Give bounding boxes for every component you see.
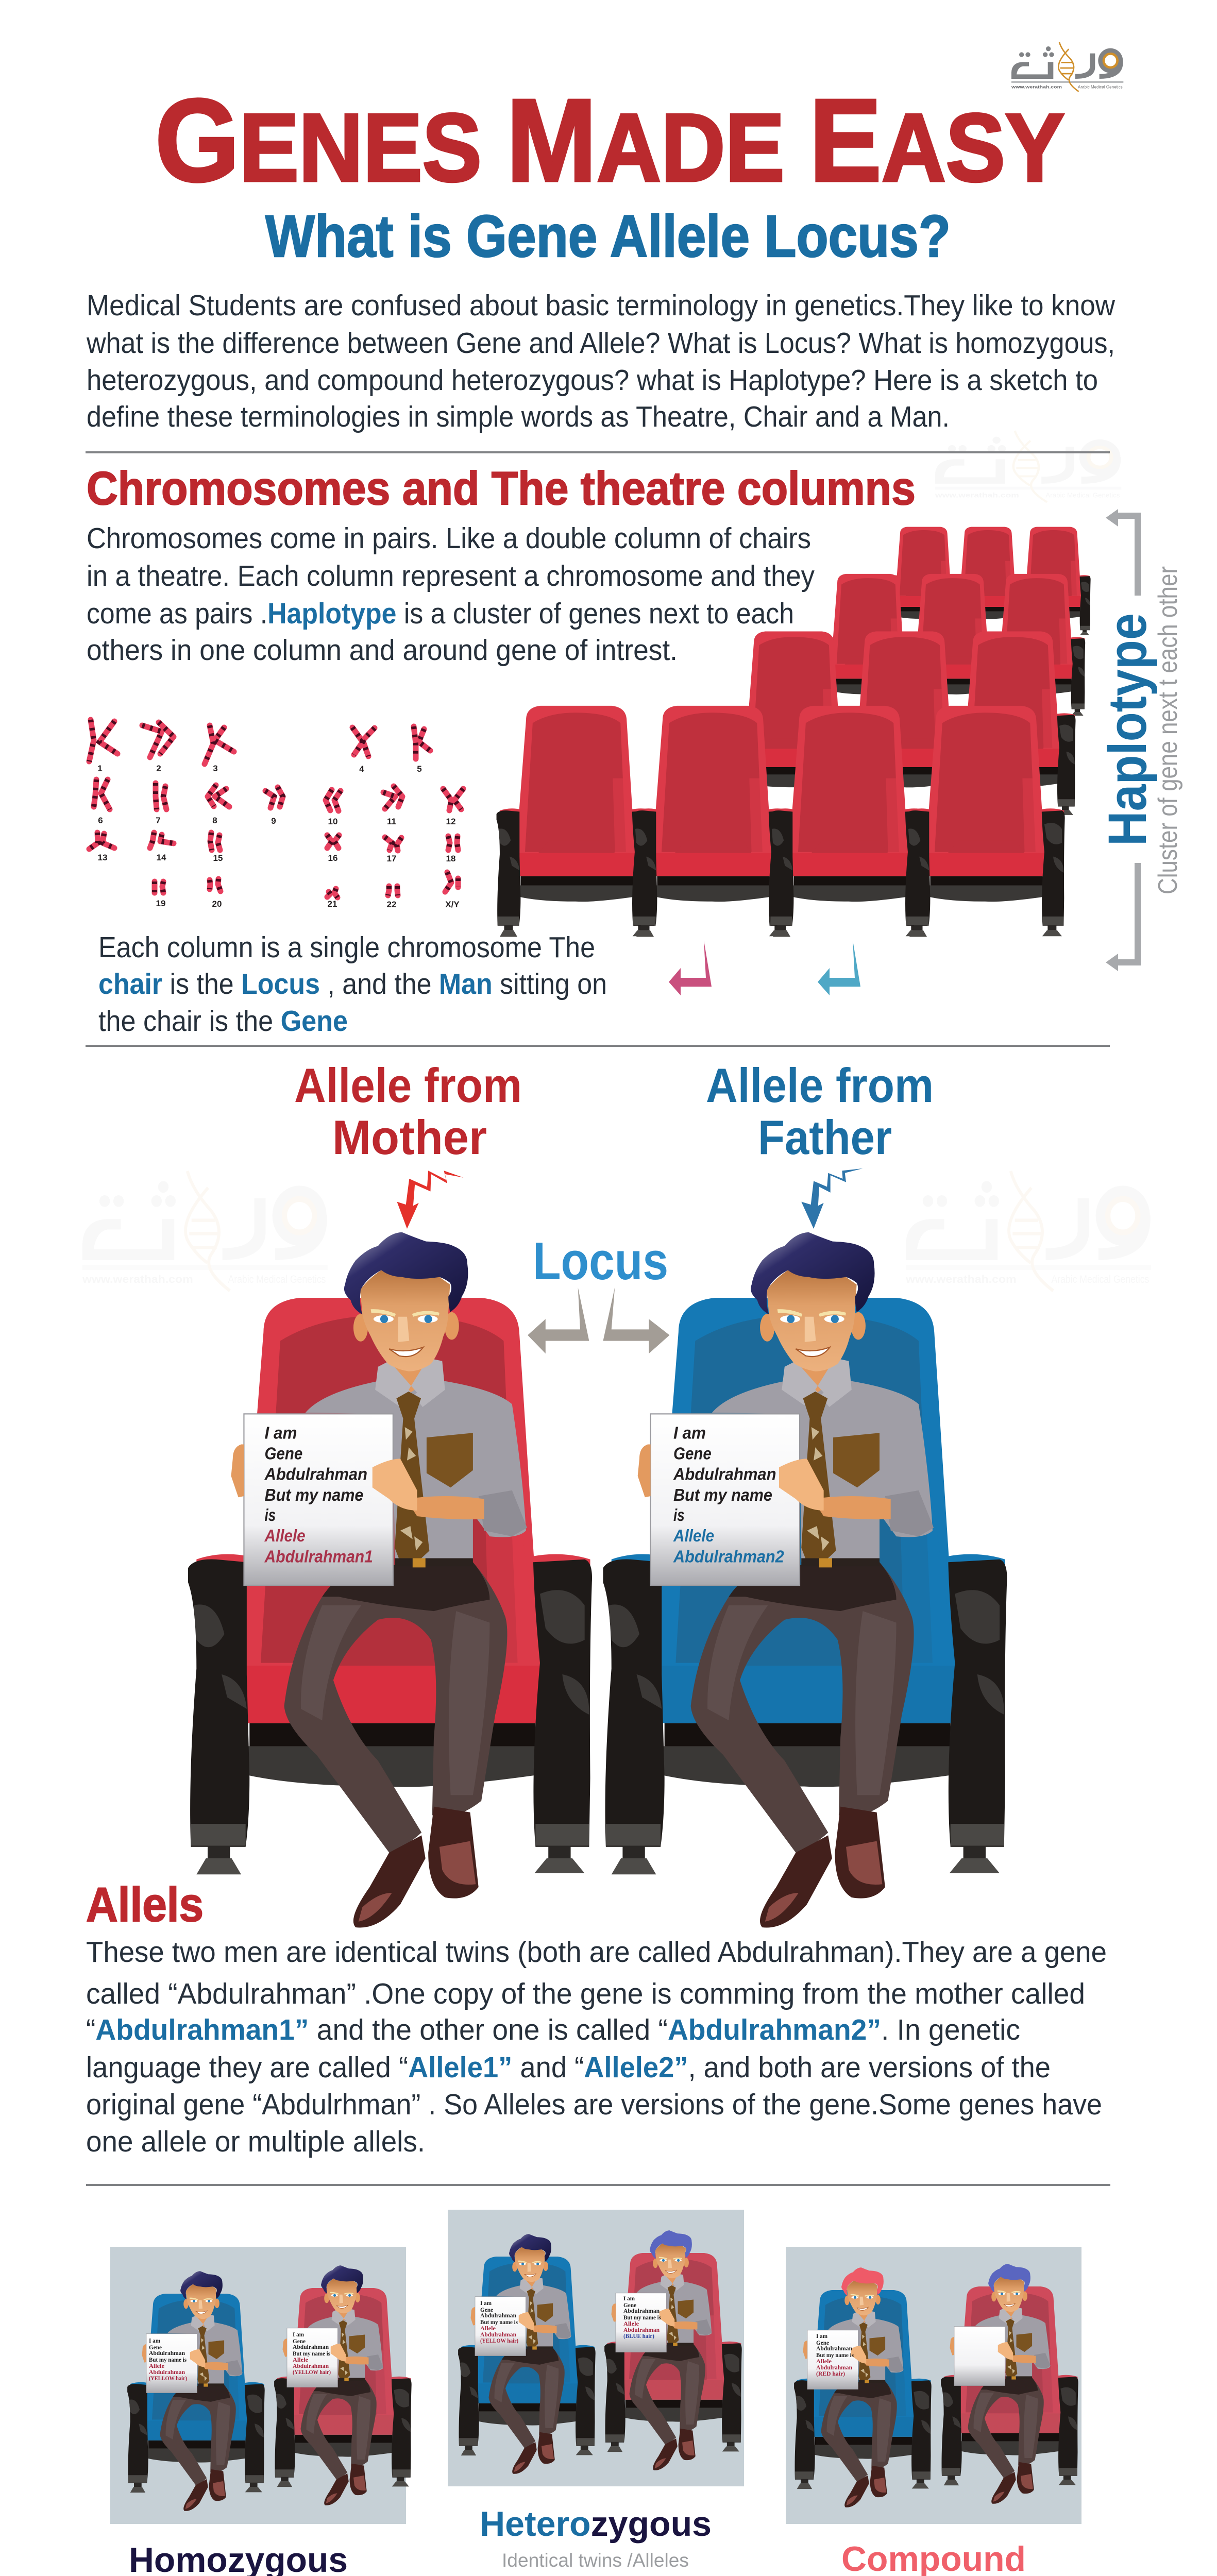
- intro paragraph: Medical Students are confused about basic terminology in genetics.They like to know: [87, 289, 1115, 322]
- panel: heterozygous: Gene: [623, 2301, 637, 2309]
- caption: heterozygous: Heterozygous: [480, 2504, 712, 2544]
- panel: compound heterozygous: But my name is: [816, 2351, 854, 2359]
- arrow: locus right: [603, 1287, 669, 1353]
- panel: homozygous: [110, 2247, 412, 2524]
- panel: heterozygous: (BLUE hair): [623, 2332, 654, 2340]
- caption: heterozygous: [450, 2504, 742, 2576]
- caption: heterozygous: Identical twins /Alleles: [502, 2550, 689, 2571]
- allels text: “Abdulrahman1” and the other one is called “Abdulrahman2”. In genetic: [86, 2013, 1020, 2046]
- panel: homozygous: Abdulrahman: [293, 2343, 329, 2350]
- arrow: pink column: [669, 940, 712, 995]
- panel: homozygous: Abdulrahman: [293, 2362, 329, 2369]
- sign text: allele 2: I am: [673, 1423, 706, 1442]
- panel: heterozygous: (YELLOW hair): [480, 2337, 518, 2344]
- watermark: right of scene: [905, 1171, 1151, 1291]
- chromosomes text: in a theatre. Each column represent a chromosome and they: [87, 560, 815, 592]
- column caption text: [98, 931, 607, 1038]
- allels text: one allele or multiple allels.: [86, 2125, 425, 2158]
- panel: homozygous: Gene: [149, 2344, 162, 2351]
- man: mother allele: [231, 1232, 527, 1928]
- heading: chromosomes: Chromosomes and The theatre columns: [87, 463, 916, 515]
- man: father allele: [638, 1232, 934, 1928]
- karyotype chart: 20: [212, 899, 222, 909]
- karyotype chart: 6: [98, 816, 103, 825]
- karyotype chart: 3: [213, 764, 218, 773]
- panel: heterozygous: Gene: [480, 2306, 494, 2313]
- arrow: red zigzag: [397, 1171, 463, 1229]
- intro paragraph: define these terminologies in simple words as Theatre, Chair and a Man.: [87, 400, 950, 433]
- panel: homozygous: I am: [149, 2337, 160, 2344]
- karyotype chart: 10: [328, 817, 337, 826]
- karyotype chart: 7: [156, 816, 161, 825]
- panel: heterozygous: I am: [623, 2295, 635, 2302]
- blue chair: [603, 1298, 1007, 1874]
- karyotype chart: 15: [213, 853, 223, 863]
- title: GENES MADE EASY: [155, 75, 1064, 206]
- haplotype bracket arrows: [1106, 509, 1141, 971]
- karyotype chart: 5: [417, 764, 422, 774]
- karyotype chart: X/Y: [445, 900, 460, 909]
- karyotype chart: 19: [156, 899, 165, 908]
- panel: heterozygous: Allele: [623, 2320, 639, 2327]
- label: allele from father: Allele from: [706, 1058, 934, 1112]
- allels text: language they are called “Allele1” and “Allele2”, and both are versions of the: [86, 2051, 1051, 2084]
- intro paragraph: what is the difference between Gene and Allele? What is Locus? What is homozygous,: [86, 327, 1115, 360]
- panel: compound heterozygous: Allele: [816, 2358, 832, 2365]
- scene: two twins on chairs: [188, 1168, 1007, 1928]
- chromosomes text: others in one column and around gene of intrest.: [87, 634, 678, 667]
- karyotype chart: 9: [271, 816, 276, 826]
- panel: homozygous: Abdulrahman: [149, 2368, 185, 2376]
- panel: heterozygous: Abdulrahman: [480, 2312, 516, 2319]
- karyotype chart: 18: [446, 854, 455, 863]
- haplotype caption: Cluster of gene next t each other: [1153, 566, 1183, 894]
- column caption text: Each column is a single chromosome The: [98, 931, 595, 964]
- sign text: allele 2: is: [673, 1505, 685, 1524]
- panel: heterozygous: Allele: [480, 2325, 496, 2332]
- sign text: allele 1: But my name: [265, 1485, 363, 1504]
- sign text: allele 1: I am: [265, 1423, 297, 1442]
- chromosomes text: come as pairs .Haplotype is a cluster of genes next to each: [87, 597, 794, 630]
- karyotype chart: 1: [97, 764, 103, 773]
- sign text: allele 1: [264, 1423, 373, 1566]
- label: allele from father: Father: [758, 1110, 892, 1164]
- panel: heterozygous: Abdulrahman: [480, 2331, 516, 2338]
- subtitle: What is Gene Allele Locus?: [265, 204, 951, 269]
- sign text: allele 2: But my name: [673, 1485, 772, 1504]
- sign text: allele 2: Gene: [673, 1444, 712, 1463]
- panel: heterozygous: But my name is: [480, 2318, 518, 2326]
- allels text: These two men are identical twins (both are called Abdulrahman).They are a gene: [86, 1936, 1107, 1969]
- arrow: blue zigzag: [801, 1168, 863, 1229]
- panel: compound heterozygous: I am: [816, 2332, 827, 2340]
- sign text: allele 1: Abdulrahman1: [264, 1547, 373, 1566]
- karyotype chart: 12: [446, 817, 455, 826]
- panel: homozygous: Abdulrahman: [149, 2349, 185, 2357]
- chromosomes text: Chromosomes come in pairs. Like a double column of chairs: [87, 522, 811, 555]
- intro paragraph: [86, 289, 1115, 433]
- panel: heterozygous: But my name is: [623, 2314, 661, 2321]
- karyotype chart: 11: [387, 817, 396, 826]
- caption: compound heterozygous: [798, 2539, 1071, 2576]
- heading: allels: Allels: [86, 1877, 204, 1931]
- arrow: locus left: [528, 1287, 589, 1353]
- panel: homozygous: (YELLOW hair): [149, 2375, 187, 2382]
- label: allele from mother: Mother: [332, 1110, 487, 1164]
- panel: compound heterozygous: [786, 2247, 1081, 2524]
- karyotype chart: 16: [328, 853, 337, 863]
- panel: compound heterozygous: (RED hair): [816, 2370, 845, 2377]
- column caption text: chair is the Locus , and the Man sitting on: [98, 968, 607, 1001]
- karyotype chart: 4: [359, 764, 364, 774]
- panel: heterozygous: Abdulrahman: [623, 2326, 660, 2333]
- panel: homozygous: I am: [293, 2331, 304, 2338]
- karyotype chart: 8: [212, 816, 217, 825]
- column caption text: the chair is the Gene: [98, 1005, 348, 1038]
- sign text: allele 1: Abdulrahman: [264, 1464, 367, 1484]
- sign text: allele 1: Gene: [265, 1444, 302, 1463]
- allels text: original gene “Abdulrhman” . So Alleles are versions of the gene.Some genes have: [86, 2088, 1102, 2121]
- label: allele from mother: Allele from: [294, 1058, 522, 1112]
- sign text: allele 2: Abdulrahman2: [673, 1547, 784, 1566]
- sign text: allele 2: [673, 1423, 784, 1566]
- panel: homozygous: Allele: [293, 2356, 309, 2363]
- watermark: top right: [935, 431, 1121, 502]
- sign text: allele 2: Allele: [673, 1526, 714, 1545]
- panel: compound heterozygous: Abdulrahman: [816, 2364, 852, 2371]
- label: locus: Locus: [533, 1231, 668, 1291]
- panel: heterozygous: [448, 2210, 744, 2486]
- haplotype label: Haplotype: [1097, 613, 1158, 846]
- panel: homozygous: But my name is: [149, 2356, 187, 2363]
- panel: heterozygous: Abdulrahman: [623, 2307, 660, 2314]
- karyotype chart: 14: [157, 853, 166, 862]
- allels text: called “Abdulrahman” .One copy of the gene is comming from the mother called: [86, 1977, 1085, 2010]
- allels text: [86, 1936, 1107, 2158]
- karyotype chart: [89, 720, 463, 909]
- panel: compound heterozygous: Abdulrahman: [816, 2345, 852, 2352]
- panel: homozygous: (YELLOW hair): [293, 2368, 331, 2376]
- sign text: allele 1: Allele: [264, 1526, 306, 1545]
- panel: homozygous: Allele: [149, 2362, 165, 2369]
- arrow: blue column: [818, 940, 860, 995]
- karyotype chart: 13: [98, 853, 107, 862]
- karyotype chart: 22: [387, 900, 396, 909]
- panel: heterozygous: I am: [480, 2299, 492, 2307]
- watermark: left of scene: [82, 1171, 328, 1291]
- logo: top right: [1011, 42, 1123, 92]
- red chair: [188, 1298, 592, 1874]
- panel: homozygous: But my name is: [293, 2350, 330, 2357]
- karyotype chart: 21: [328, 899, 337, 909]
- karyotype chart: 17: [387, 854, 396, 863]
- label: allele from mother: [294, 1058, 522, 1164]
- panel: compound heterozygous: Gene: [816, 2339, 830, 2346]
- label: allele from father: [706, 1058, 934, 1164]
- sign text: allele 1: is: [265, 1505, 276, 1524]
- intro paragraph: heterozygous, and compound heterozygous? what is Haplotype? Here is a sketch to: [87, 364, 1098, 397]
- chromosomes text: [87, 522, 815, 667]
- sign text: allele 2: Abdulrahman: [673, 1464, 776, 1484]
- panel: homozygous: Gene: [293, 2337, 306, 2345]
- theatre chairs: [497, 527, 1091, 937]
- karyotype chart: 2: [156, 764, 161, 773]
